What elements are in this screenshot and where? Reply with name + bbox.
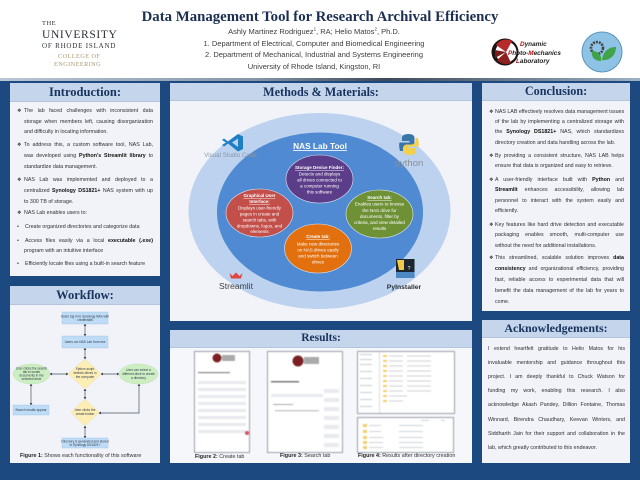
caption: figure 1: Figure 1: Shows each functionality of this software (20, 453, 141, 459)
text: conclusion bullets: consistency and organizational efficiency, providing (495, 266, 624, 272)
text: introduction bullets: to 300 TB of storage. (24, 199, 73, 205)
node: graphical user interface: Displays user-friendly (238, 206, 282, 210)
step: directory stored (61, 438, 109, 448)
text: conclusion bullets: ensure that data is organized and easy to retrieve. (495, 163, 613, 169)
node: storage device finder: Storage Device Finder: (295, 165, 345, 170)
logo: University of Rhode Island: THE (42, 20, 56, 27)
outer ellipse (188, 113, 450, 309)
text: conclusion bullets: This streamlined, scalable solution improves data (495, 255, 624, 261)
text: conclusion bullets: By providing a consistent structure, NAS LAB helps (495, 153, 624, 159)
text: acknowledgements: Siddharth Jain for their support and collaboration in the (488, 431, 625, 437)
label: NAS Lab Tool: NAS Lab Tool (293, 141, 347, 151)
step: select drive: different drive to create (122, 372, 155, 376)
gradient strip (0, 78, 640, 81)
node: create tab: and switch between (298, 254, 338, 258)
node: storage device finder: a computer running (300, 184, 339, 188)
heading: introduction (10, 83, 160, 102)
text: conclusion bullets: ❖ (489, 222, 493, 228)
text: conclusion bullets: personnel to interact with the system easily and (495, 198, 624, 204)
text: introduction bullets: centralized Synology DS1821+ NAS system with up (24, 188, 153, 194)
step: directory stored: in Synology DS1821+ (70, 443, 101, 447)
node: search tab (346, 190, 413, 238)
step: log in: Users log in to Synology NAS with (61, 314, 109, 318)
icon: PyInstaller (387, 259, 422, 291)
node: create tab: drives (312, 260, 325, 264)
logo: University of Rhode Island (42, 20, 118, 68)
text: conclusion bullets: Key features like hard drive detection and executable (495, 222, 624, 228)
flowchart (12, 312, 158, 448)
icon: Streamlit (219, 272, 254, 291)
panel: conclusion (482, 83, 630, 311)
node: create tab: on NAS drives easily (297, 248, 340, 252)
text: conclusion bullets: ❖ (489, 153, 493, 159)
affiliation 3: University of Rhode Island, Kingston, RI (248, 62, 380, 71)
text: acknowledgements: acknowledge Akash Pandey, Dillion Fontaine, Thomas (488, 402, 625, 408)
step: select drive: User can select a (126, 368, 151, 372)
step: search button: tab to locate (23, 370, 40, 374)
node: storage device finder: all drives connected to (297, 178, 342, 182)
text: conclusion bullets: packaging enables smooth, multi-computer use (495, 232, 624, 238)
heading: workflow: Workflow: (56, 288, 114, 302)
text: conclusion bullets: A user-friendly interface built with Python and (495, 177, 624, 183)
text: conclusion bullets: the Synology DS1821+ NAS, which standardizes (495, 129, 624, 135)
text: acknowledgements: Winnard, Birendra Chaudhary, Keevan Winters, and (488, 417, 625, 423)
text: conclusion bullets: Streamlit enhances accessibility, allowing lab (495, 187, 624, 193)
node: create tab (284, 224, 352, 273)
icon: PyInstaller: ? (408, 266, 411, 272)
heading: introduction: Introduction: (49, 85, 121, 99)
icon: Visual Studio Code (204, 134, 257, 159)
text: introduction bullets (17, 108, 153, 267)
node: graphical user interface: Interface: (249, 199, 270, 204)
step: run NAS Lab: Users run NAS Lab from exe (65, 340, 106, 344)
inner ellipse (217, 132, 423, 292)
step: search button (13, 364, 50, 384)
logo: Dynamic Photo-Mechanics Laboratory: Laboratory (516, 58, 550, 65)
node: create tab: Make new directories (297, 242, 340, 246)
logo: sustainability circle (582, 32, 622, 72)
node: search tab: the NAS drive for (362, 208, 397, 213)
step: directory stored: Directory is generated and stored (61, 439, 109, 443)
decision: create button: create button (76, 412, 95, 416)
text: introduction bullets: ❖ (17, 108, 21, 114)
text: introduction bullets: • (17, 261, 19, 267)
step: search button: selected drive (22, 377, 42, 381)
node: search tab: results (373, 226, 387, 231)
heading: conclusion (482, 83, 630, 101)
logo: Dynamic Photo-Mechanics Laboratory: Dynamic (520, 41, 547, 48)
text: introduction bullets: • (17, 224, 19, 230)
text: introduction bullets: To address this, a custom software tool, NAS Lab, (24, 142, 153, 148)
step: log in: credentials (77, 318, 93, 322)
heading: acknowledgements: Acknowledgements: (504, 321, 608, 335)
node: storage device finder (286, 155, 353, 203)
text: introduction bullets: ❖ (17, 177, 21, 183)
text: acknowledgements: project. I am deeply thankful to Chuck Watson for (488, 374, 625, 380)
node: graphical user interface: search tabs, with (243, 218, 277, 222)
text: conclusion bullets: of the lab by implementing a centralized storage with (495, 119, 624, 125)
node: graphical user interface: Graphical User (243, 193, 276, 198)
heading: results: Results: (301, 332, 341, 344)
node: graphical user interface: dropdowns, logos, and (237, 224, 283, 228)
title: Data Management Tool for Research Archival Efficiency (142, 9, 498, 25)
screenshot: search tab (266, 350, 344, 454)
step: search results (13, 405, 49, 415)
text: conclusion bullets: ❖ (489, 255, 493, 261)
affiliation 2: 2. Department of Mechanical, Industrial and Systems Engineering (205, 50, 423, 59)
text: introduction bullets: Access files easily via a local executable (.exe) (25, 238, 153, 244)
text: conclusion bullets: without the need for additional installations. (495, 243, 596, 249)
text: acknowledgements: lab, which greatly contributed to this endeavor. (488, 445, 597, 451)
step: search button: User clicks the search (16, 366, 47, 370)
text: conclusion bullets (489, 109, 624, 305)
step: search button: documents in the (19, 374, 44, 378)
node: storage device finder: Detects and displays (299, 172, 341, 176)
logo: University of Rhode Island: COLLEGE OF (58, 53, 100, 60)
screenshot: new folders (356, 416, 454, 454)
heading: methods and materials (170, 83, 472, 101)
heading: conclusion: Conclusion: (525, 84, 587, 98)
node: search tab: Search tab: (367, 195, 392, 200)
step: run NAS Lab (62, 336, 108, 348)
text: conclusion bullets: directory creation and data handling across the lab. (495, 140, 615, 146)
text: introduction bullets: The lab faced challenges with inconsistent data (24, 108, 153, 114)
logo: University of Rhode Island: ENGINEERING (54, 61, 101, 68)
text: conclusion bullets: NAS LAB effectively resolves data management issues (495, 109, 624, 115)
logo: University of Rhode Island: UNIVERSITY (42, 29, 118, 41)
text: conclusion bullets: come. (495, 299, 509, 305)
decision: detect drives: Python script (76, 367, 94, 371)
flow arrows (31, 324, 139, 438)
heading: results (170, 330, 472, 348)
panel: methods and materials (170, 83, 472, 321)
logo: Dynamic Photo-Mechanics Laboratory (492, 38, 561, 66)
caption: figure 4: Figure 4: Results after directory creation (358, 453, 455, 459)
text: introduction bullets: and difficulty in locating information. (24, 129, 108, 135)
node: storage device finder: this software (307, 190, 333, 194)
icon: Visual Studio Code: Visual Studio Code (204, 152, 257, 159)
panel: acknowledgements (482, 320, 630, 463)
heading: workflow (10, 286, 160, 305)
text: introduction bullets: • (17, 238, 19, 244)
node: create tab: Create tab: (306, 234, 330, 239)
authors: Ashly Martinez Rodriguez1, RA; Helio Matos2, Ph.D. (228, 26, 400, 36)
text: acknowledgements: funding my work, enabling this research. I also (488, 388, 625, 394)
decision: detect drives: the computer (76, 375, 95, 379)
heading: methods and materials: Methods & Materials: (263, 85, 379, 99)
panel: results (170, 330, 472, 463)
text: introduction bullets: storage when members left, causing disorganization (24, 119, 153, 125)
text: conclusion bullets: fast, reliable access to experimental data that will (495, 277, 624, 283)
diagram: NAS Lab Tool (188, 113, 450, 309)
text: introduction bullets: ❖ (17, 142, 21, 148)
step: log in (61, 312, 109, 324)
heading: acknowledgements (482, 320, 630, 338)
node: search tab: criteria, and view detailed (354, 220, 405, 225)
text: acknowledgements: I extend heartfelt gratitude to Helio Matos for his (488, 346, 625, 352)
decision: create button (71, 399, 99, 426)
decision: create button: User clicks the (75, 408, 96, 412)
affiliation 1: 1. Department of Electrical, Computer and Biomedical Engineering (204, 39, 424, 48)
node: search tab: Enables users to browse (355, 202, 405, 206)
logo: University of Rhode Island: OF RHODE ISLAND (42, 42, 116, 50)
text: introduction bullets: NAS Lab enables users to: (24, 210, 87, 216)
node: graphical user interface: pages in create and (240, 212, 280, 216)
decision: detect drives (68, 359, 101, 389)
text: introduction bullets: program with an intuitive interface (24, 248, 103, 254)
text: acknowledgements: invaluable mentorship and guidance throughout this (488, 360, 625, 366)
text: introduction bullets: Efficiently locate files using a built-in search feature (25, 261, 145, 267)
icon: Python: python (395, 158, 423, 169)
step: select drive: a directory (131, 376, 146, 380)
header band (0, 0, 640, 80)
caption: figure 2: Figure 2: Create tab (195, 454, 244, 460)
text: acknowledgements (488, 346, 625, 451)
screenshot: directory listing (356, 350, 456, 414)
text: introduction bullets: standardize data management. (24, 164, 97, 170)
text: introduction bullets: NAS Lab was implemented and deployed to a (24, 177, 153, 183)
icon: PyInstaller: PyInstaller (387, 284, 422, 291)
node: graphical user interface: elements (250, 229, 269, 234)
node: graphical user interface (226, 189, 293, 237)
logo: Dynamic Photo-Mechanics Laboratory: Photo-Mechanics (508, 50, 561, 57)
panel: workflow (10, 286, 160, 463)
text: introduction bullets: Create organized directories and categorize data (25, 224, 140, 230)
screenshot: create tab (194, 350, 250, 454)
text: introduction bullets: ❖ (17, 210, 21, 216)
text: conclusion bullets: ❖ (489, 109, 493, 115)
text: conclusion bullets: efficiently. (495, 208, 518, 214)
panel: introduction (10, 83, 160, 276)
step: search results: Search results appear (15, 408, 48, 412)
decision: detect drives: detects drives in (73, 371, 97, 375)
text: introduction bullets: was developed using Python's Streamlit library to (24, 153, 153, 159)
icon: Streamlit: Streamlit (219, 281, 254, 291)
caption: figure 3: Figure 3: Search tab (280, 453, 330, 459)
text: conclusion bullets: ❖ (489, 177, 493, 183)
text: conclusion bullets: benefit the data management of the lab for years to (495, 288, 624, 294)
icon: Python (395, 134, 423, 169)
node: search tab: documents, filter by (360, 214, 400, 219)
step: select drive (119, 364, 158, 384)
